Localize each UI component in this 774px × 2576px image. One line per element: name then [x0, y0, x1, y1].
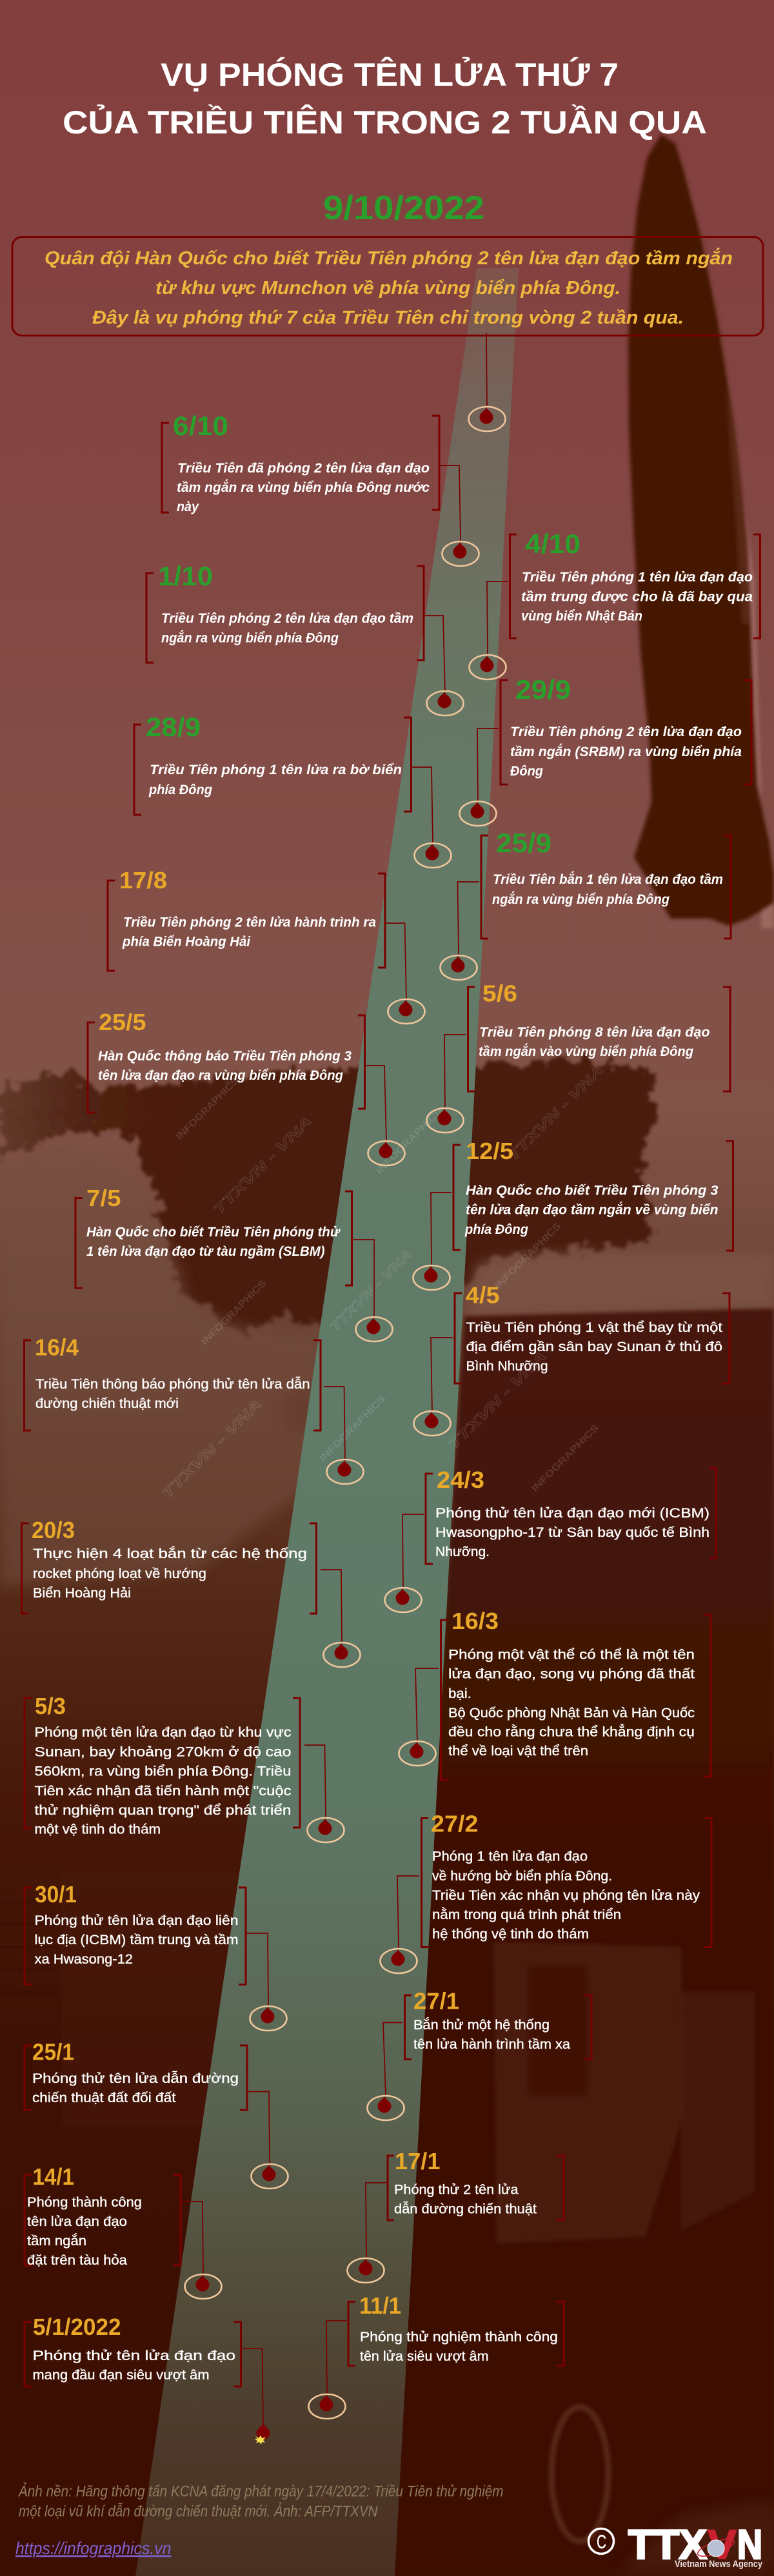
- event: 5/1/2022: [25, 2314, 270, 2444]
- event: 25/5: [88, 1009, 405, 1166]
- event: 24/3: Phóng thử tên lửa đạn đạo mới (ICBM): [435, 1506, 710, 1521]
- event: 4/10: [470, 529, 760, 679]
- event: 27/2: nằm trong quá trình phát triển: [432, 1908, 621, 1922]
- event: 28/9: Triều Tiên phóng 1 tên lửa ra bờ biển: [150, 763, 402, 777]
- photo credit: Ảnh nền: Hãng thông tấn KCNA đăng phát ngày 17/4/2022: Triều Tiên thử nghiệm: [17, 2482, 503, 2500]
- event: 11/1: Phóng thử nghiệm thành công: [360, 2330, 558, 2345]
- event: 27/2: Triều Tiên xác nhận vụ phóng tên lửa này: [432, 1888, 700, 1903]
- event: 5/3: [25, 1693, 344, 1842]
- callout: latest launch: từ khu vực Munchon về phía vùng biển phía Đông.: [155, 278, 620, 298]
- event: 14/1: Phóng thành công: [27, 2195, 142, 2210]
- event: 25/9: Triều Tiên bắn 1 tên lửa đạn đạo tầm: [493, 872, 723, 887]
- event: 5/1/2022: 5/1/2022: [33, 2314, 121, 2340]
- event: 25/1: 25/1: [32, 2038, 74, 2065]
- event: 24/3: 24/3: [437, 1467, 484, 1493]
- callout: latest launch: Quân đội Hàn Quốc cho biết Triều Tiên phóng 2 tên lửa đạn đạo tầm ngắn: [45, 247, 733, 269]
- event: 27/2: Phóng 1 tên lửa đạn đạo: [432, 1849, 588, 1864]
- event: 25/5: tên lửa đạn đạo ra vùng biển phía Đông: [98, 1068, 343, 1083]
- event: 16/3: Phóng một vật thể có thể là một tên: [448, 1648, 695, 1662]
- event: 30/1: lục địa (ICBM) tầm trung và tầm: [35, 1933, 239, 1947]
- event: 20/3: rocket phóng loạt về hướng: [33, 1566, 206, 1581]
- event: 11/1: tên lửa siêu vượt âm: [360, 2349, 489, 2364]
- light beam / missile trail: [135, 268, 519, 2576]
- event: 17/8: 17/8: [119, 867, 167, 893]
- event: 11/1: 11/1: [359, 2292, 401, 2319]
- photo credit: một loại vũ khí dẫn đường chiến thuật mới. Ảnh: AFP/TTXVN: [19, 2501, 378, 2521]
- event: 29/9: tầm ngắn (SRBM) ra vùng biển phía: [510, 745, 742, 759]
- event: 27/1: [368, 1988, 591, 2120]
- event: 4/10: Triều Tiên phóng 1 tên lửa đạn đạo: [522, 570, 753, 585]
- event: 4/5: [414, 1282, 729, 1436]
- event: 17/1: Phóng thử 2 tên lửa: [394, 2183, 519, 2197]
- event: 7/5: 1 tên lửa đạn đạo từ tàu ngầm (SLBM): [86, 1244, 325, 1259]
- event: 25/5: Hàn Quốc thông báo Triều Tiên phóng 3: [98, 1049, 352, 1064]
- logo: TTXVN Vietnam News Agency: TTX: [628, 2521, 707, 2568]
- event: 16/4: Triều Tiên thông báo phóng thử tên lửa dẫn: [35, 1377, 310, 1392]
- event: 29/9: Đông: [510, 764, 543, 779]
- event: 4/10: tầm trung được cho là đã bay qua: [521, 589, 753, 605]
- logo: TTXVN Vietnam News Agency: N: [737, 2521, 762, 2568]
- event: 16/3: đều cho rằng chưa thể khẳng định cụ: [448, 1724, 695, 1739]
- event: 6/10: Triều Tiên đã phóng 2 tên lửa đạn đạo: [177, 461, 430, 476]
- event: 29/9: [459, 674, 751, 826]
- event: 11/1: [308, 2292, 564, 2419]
- event: 30/1: xa Hwasong-12: [35, 1952, 133, 1967]
- event: 1/10: [146, 561, 463, 716]
- event: 16/4: 16/4: [35, 1334, 79, 1360]
- event: 29/9: Triều Tiên phóng 2 tên lửa đạn đạo: [510, 725, 742, 739]
- event: 27/1: 27/1: [413, 1988, 459, 2014]
- event: 7/5: 7/5: [86, 1185, 121, 1211]
- event: 12/5: Hàn Quốc cho biết Triều Tiên phóng 3: [466, 1184, 719, 1198]
- event: 4/10: vùng biển Nhật Bản: [521, 609, 642, 624]
- event: 12/5: 12/5: [466, 1138, 513, 1164]
- watermarks: INFOGRAPHICS: [199, 1278, 268, 1347]
- event: 4/5: 4/5: [466, 1282, 499, 1309]
- title: CỦA TRIỀU TIÊN TRONG 2 TUẦN QUA: [63, 104, 707, 141]
- logo: TTXVN Vietnam News Agency: C: [597, 2532, 606, 2553]
- event: 5/6: [427, 980, 730, 1133]
- event: 27/2: [381, 1810, 711, 1973]
- event: 17/8: Triều Tiên phóng 2 tên lửa hành trình ra: [123, 915, 376, 930]
- callout: latest launch: Đây là vụ phóng thứ 7 của Triều Tiên chỉ trong vòng 2 tuần qua.: [92, 307, 684, 328]
- event: 17/8: [108, 867, 424, 1024]
- event: 25/9: ngắn ra vùng biển phía Đông: [492, 892, 670, 907]
- event: 17/1: dẫn đường chiến thuật: [394, 2202, 537, 2216]
- event: 5/1/2022: mang đầu đạn siêu vượt âm: [32, 2368, 209, 2383]
- event: 4/10: 4/10: [525, 529, 580, 559]
- source link: https://infographics.vn: [15, 2539, 172, 2558]
- event: 12/5: tên lửa đạn đạo tầm ngắn về vùng biển: [466, 1203, 719, 1217]
- event: 14/1: [25, 2163, 222, 2299]
- event: 4/5: Bình Nhưỡng: [466, 1359, 548, 1374]
- event: 5/3: 5/3: [35, 1693, 66, 1719]
- event: 24/3: Hwasongpho-17 từ Sân bay quốc tế Bình: [435, 1525, 710, 1540]
- watermarks: TTXVN - VNA: [211, 1113, 315, 1218]
- logo: TTXVN Vietnam News Agency: [588, 2521, 763, 2570]
- event: 14/1: đặt trên tàu hỏa: [27, 2253, 127, 2268]
- event: 6/10: [162, 411, 479, 566]
- watermarks: TTXVN - VNA: [327, 1247, 415, 1335]
- event: 30/1: [25, 1881, 286, 2031]
- event: 16/3: [399, 1608, 711, 1780]
- watermarks: INFOGRAPHICS: [174, 1075, 241, 1142]
- event: 27/2: về hướng bờ biển phía Đông.: [432, 1869, 612, 1884]
- main date: 9/10/2022: [323, 190, 484, 227]
- event: 25/5: 25/5: [99, 1009, 146, 1035]
- callout: latest launch: [12, 237, 763, 335]
- event: 16/4: [25, 1334, 364, 1484]
- event: 30/1: 30/1: [35, 1881, 77, 1908]
- event: 14/1: tầm ngắn: [27, 2234, 86, 2249]
- event: 25/1: [25, 2038, 288, 2189]
- event: 24/3: Nhưỡng.: [435, 1545, 490, 1559]
- watermarks: INFOGRAPHICS: [317, 1393, 388, 1464]
- event: 5/3: một vệ tinh do thám: [35, 1822, 161, 1837]
- event: 5/6: tầm ngắn vào vùng biển phía Đông: [479, 1044, 693, 1059]
- event: 16/4: đường chiến thuật mới: [35, 1396, 179, 1411]
- event: 6/10: này: [177, 500, 199, 514]
- event: 4/5: Triều Tiên phóng 1 vật thể bay từ một: [466, 1320, 722, 1335]
- event: 29/9: 29/9: [515, 674, 571, 705]
- event: 28/9: [134, 712, 452, 868]
- event: 12/5: [413, 1138, 733, 1290]
- event: 6/10: tầm ngắn ra vùng biển phía Đông nước: [177, 480, 430, 495]
- photo credit: [17, 2482, 503, 2521]
- event: 1/10: Triều Tiên phóng 2 tên lửa đạn đạo tầm: [161, 611, 413, 626]
- logo: TTXVN Vietnam News Agency: V: [708, 2521, 737, 2568]
- event: 12/5: phía Đông: [464, 1222, 528, 1237]
- event: 1/10: 1/10: [158, 561, 213, 591]
- event: 20/3: 20/3: [32, 1517, 75, 1543]
- watermarks: [159, 1062, 607, 1502]
- event: 17/8: phía Biển Hoàng Hải: [122, 935, 251, 949]
- event: 7/5: [75, 1185, 392, 1342]
- event: 5/1/2022: Phóng thử tên lửa đạn đạo: [32, 2348, 235, 2363]
- event: 5/3: 560km, ra vùng biển phía Đông. Triều: [35, 1764, 292, 1779]
- watermarks: INFOGRAPHICS: [530, 1423, 601, 1494]
- event: 30/1: Phóng thử tên lửa đạn đạo liên: [35, 1913, 239, 1928]
- event: 5/6: 5/6: [482, 980, 517, 1007]
- event: 7/5: Hàn Quốc cho biết Triều Tiên phóng thử: [86, 1225, 341, 1240]
- event: 5/3: thử nghiệm quan trọng" để phát triển: [35, 1803, 292, 1818]
- event: 27/2: 27/2: [431, 1810, 479, 1837]
- event: 28/9: phía Đông: [148, 783, 212, 797]
- title: VỤ PHÓNG TÊN LỬA THỨ 7: [161, 56, 619, 93]
- event: 5/6: Triều Tiên phóng 8 tên lửa đạn đạo: [479, 1025, 710, 1040]
- watermarks: INFOGRAPHICS: [374, 1106, 444, 1176]
- event: 5/3: Sunan, bay khoảng 270km ở độ cao: [35, 1744, 291, 1760]
- event: 28/9: 28/9: [146, 712, 201, 742]
- event: 20/3: Thực hiện 4 loạt bắn từ các hệ thống: [33, 1547, 307, 1561]
- watermarks: TTXVN - VNA: [446, 1349, 550, 1453]
- event: 27/1: tên lửa hành trình tầm xa: [413, 2037, 570, 2052]
- event: 16/3: 16/3: [452, 1608, 499, 1634]
- event: 20/3: [22, 1517, 360, 1667]
- event: 1/10: ngắn ra vùng biển phía Đông: [161, 630, 339, 646]
- watermarks: TTXVN - VNA: [505, 1062, 607, 1164]
- event: 6/10: 6/10: [173, 411, 228, 441]
- event: 25/1: Phóng thử tên lửa dẫn đường: [32, 2071, 239, 2086]
- event: 14/1: 14/1: [32, 2163, 74, 2190]
- event: 27/2: hệ thống vệ tinh do thám: [432, 1927, 589, 1942]
- event: 5/3: Phóng một tên lửa đạn đạo từ khu vực: [35, 1725, 292, 1740]
- event: 17/1: 17/1: [395, 2148, 440, 2174]
- event: 25/9: 25/9: [496, 828, 551, 858]
- event: 25/9: [440, 828, 731, 980]
- watermarks: TTXVN - VNA: [159, 1396, 265, 1502]
- event: 5/3: Tiên xác nhận đã tiến hành một "cuộc: [35, 1784, 292, 1799]
- event: 16/3: thể về loại vật thể trên: [448, 1744, 588, 1759]
- event: 17/1: [347, 2148, 564, 2283]
- event: 25/1: chiến thuật đất đối đất: [32, 2091, 176, 2105]
- watermarks: INFOGRAPHICS: [493, 1220, 563, 1291]
- marker: 9/10: [468, 333, 506, 431]
- event: 14/1: tên lửa đạn đạo: [27, 2214, 127, 2229]
- event: 16/3: bại.: [448, 1686, 471, 1701]
- event: 24/3: [384, 1467, 716, 1612]
- event: 16/3: lửa đạn đạo, song vụ phóng đã thất: [448, 1667, 695, 1681]
- event: 27/1: Bắn thử một hệ thống: [413, 2018, 550, 2033]
- event: 20/3: Biển Hoàng Hải: [33, 1586, 131, 1601]
- event: 16/3: Bộ Quốc phòng Nhật Bản và Hàn Quốc: [448, 1706, 695, 1721]
- event: 4/5: địa điểm gần sân bay Sunan ở thủ đô: [466, 1340, 722, 1354]
- title: [63, 56, 707, 141]
